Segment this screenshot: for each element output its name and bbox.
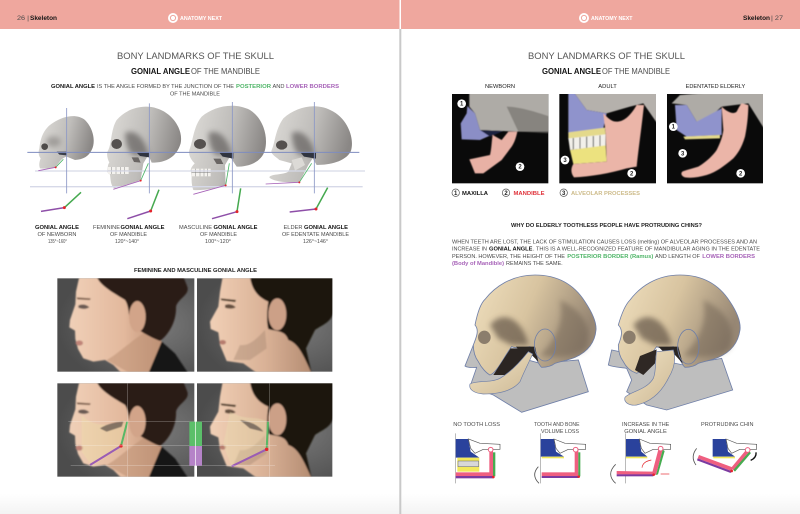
- angle lines on skulls: [38, 159, 312, 194]
- explanation paragraph: PERSON. HOWEVER, THE HEIGHT OF THE: [452, 254, 565, 260]
- caption: masculine: 100°~120°: [205, 239, 231, 245]
- caption: elderly: [282, 225, 349, 245]
- caption: no tooth loss: NO TOOTH LOSS: [453, 422, 500, 428]
- legend: mandible: [502, 189, 545, 197]
- angle diagram: feminine: [127, 190, 159, 219]
- caption: increase in the gonial angle: [622, 422, 670, 435]
- skull: feminine: [107, 107, 181, 188]
- skull: elderly edentate: [269, 106, 352, 182]
- caption: newborn: GONIAL ANGLE: [35, 225, 79, 231]
- explanation paragraph: AND LENGTH OF: [655, 254, 701, 260]
- caption: newborn: 135°~160°: [48, 239, 67, 245]
- photo: woman profile: [57, 277, 194, 373]
- explanation paragraph: [452, 240, 760, 267]
- panel: newborn jaw: 2: [518, 165, 522, 171]
- photo: man with overlay: [197, 382, 333, 478]
- caption: feminine: OF MANDIBLE: [110, 232, 147, 238]
- photo: woman with overlay: [57, 382, 194, 478]
- large skull figures: [465, 275, 740, 412]
- jaw panels: [452, 92, 765, 183]
- panel: adult jaw: 3: [563, 158, 567, 164]
- subtitle: left page: [131, 67, 260, 76]
- diagram captions: [453, 422, 754, 435]
- explanation paragraph: LOWER BORDERS: [702, 254, 755, 260]
- caption: masculine: MASCULINE: [179, 225, 212, 231]
- diagram: increase in the gonial angle: [611, 433, 671, 483]
- legend: maxilla: 1: [454, 191, 458, 197]
- folio: right: Skeleton: [743, 15, 770, 22]
- legend: maxilla: [452, 189, 489, 197]
- caption: newborn: OF NEWBORN: [38, 232, 77, 238]
- portrait photo grid: [57, 277, 333, 478]
- logo: left: ANATOMY NEXT: [180, 16, 223, 22]
- height comparison bars: [189, 422, 202, 466]
- logo: left: [168, 13, 223, 23]
- subtitle: left page: OF THE MANDIBLE: [191, 67, 260, 76]
- explanation paragraph: GONIAL ANGLE: [489, 247, 533, 253]
- explanation paragraph: WHEN TEETH ARE LOST, THE LACK OF STIMULATION CAUSES LOSS (melting) OF ALVEOLAR PROCESSES AND AN: [452, 240, 757, 246]
- legend: mandible: MANDIBLE: [514, 191, 545, 197]
- explanation paragraph: INCREASE IN: [452, 247, 487, 253]
- legend: alveolar processes: 3: [562, 191, 566, 197]
- panel: adult jaw: [559, 92, 658, 183]
- legend: mandible: 2: [504, 191, 508, 197]
- legend: alveolar processes: ALVEOLAR PROCESSES: [571, 191, 640, 197]
- caption: elderly: ELDER: [284, 225, 303, 231]
- folio: left: Skeleton: [30, 15, 57, 22]
- definition text: LOWER BORDERS: [286, 84, 339, 90]
- panel: edentated elderly jaw: [667, 92, 765, 183]
- title: right page: BONY LANDMARKS OF THE SKULL: [528, 51, 686, 62]
- logo: right: ANATOMY NEXT: [591, 16, 633, 22]
- folio: left: 26 |: [17, 15, 29, 22]
- diagram: no tooth loss: [456, 433, 500, 483]
- definition text: [51, 84, 339, 98]
- skull: masculine: [189, 106, 266, 190]
- definition text: IS THE ANGLE FORMED BY THE JUNCTION OF THE: [97, 84, 234, 90]
- panel: edentated elderly jaw: 1: [672, 125, 676, 131]
- subtitle: right page: GONIAL ANGLE: [542, 67, 601, 76]
- caption: elderly: OF EDENTATE MANDIBLE: [282, 232, 349, 238]
- caption: tooth and bone volume loss: VOLUME LOSS: [541, 429, 579, 435]
- alignment guides: [27, 102, 365, 193]
- explanation paragraph: REMAINS THE SAME.: [506, 261, 563, 267]
- panel: newborn jaw: [452, 92, 550, 183]
- definition text: OF THE MANDIBLE: [170, 92, 220, 98]
- definition text: AND: [272, 84, 285, 90]
- question heading: WHY DO ELDERLY TOOTHLESS PEOPLE HAVE PROTRUDING CHINS?: [511, 223, 703, 229]
- header band: left page: [0, 0, 400, 29]
- skull: no tooth loss profile, left: [465, 275, 596, 412]
- caption: increase in the gonial angle: GONIAL ANGLE: [624, 429, 667, 435]
- logo: right: [579, 13, 633, 23]
- legend: maxilla: MAXILLA: [462, 191, 489, 197]
- explanation paragraph: (Body of Mandible): [452, 261, 504, 267]
- photo: man profile: [197, 277, 333, 373]
- caption: increase in the gonial angle: INCREASE IN THE: [622, 422, 670, 428]
- folio: right: | 27: [771, 15, 784, 22]
- diagram: tooth and bone volume loss: [535, 433, 586, 483]
- skull comparison figure: [27, 102, 365, 219]
- bottom page shadow: [0, 494, 800, 514]
- skull: newborn: [39, 116, 94, 169]
- panel: edentated elderly jaw: 3: [681, 151, 685, 157]
- diagram: protruding chin: [693, 439, 757, 473]
- caption: masculine: [179, 225, 258, 245]
- folio: left: [17, 15, 57, 22]
- caption: elderly: 126°~146°: [303, 239, 328, 245]
- panel label: newborn: NEWBORN: [485, 84, 515, 90]
- header band: right page: [401, 0, 800, 29]
- stage diagrams: [456, 433, 757, 483]
- angle diagram: elderly: [290, 188, 328, 212]
- panel label: adult: ADULT: [598, 84, 617, 90]
- explanation paragraph: . THIS IS A WELL-RECOGNIZED FEATURE OF MANDIBULAR AGING IN THE EDENTATE: [533, 247, 760, 253]
- title: left page: BONY LANDMARKS OF THE SKULL: [117, 51, 275, 62]
- caption: tooth and bone volume loss: TOOTH AND BONE: [534, 422, 580, 428]
- angle diagram: newborn: [41, 192, 81, 211]
- definition text: POSTERIOR: [236, 84, 271, 90]
- folio: right: [743, 15, 784, 22]
- caption: masculine: GONIAL ANGLE: [214, 225, 258, 231]
- subtitle: left page: GONIAL ANGLE: [131, 67, 190, 76]
- definition text: GONIAL ANGLE: [51, 84, 95, 90]
- caption: masculine: OF MANDIBLE: [200, 232, 237, 238]
- spine gutter: [399, 29, 401, 514]
- caption: newborn: [35, 225, 79, 245]
- legend: alveolar processes: [560, 189, 640, 197]
- panel: adult jaw: 2: [630, 171, 634, 177]
- caption: feminine: 120°~140°: [115, 239, 139, 245]
- legend: [452, 189, 640, 197]
- caption: feminine: [93, 225, 165, 245]
- caption: protruding chin: PROTRUDING CHIN: [701, 422, 754, 428]
- panel label: edentated elderly: EDENTATED ELDERLY: [686, 84, 746, 90]
- caption: elderly: GONIAL ANGLE: [304, 225, 348, 231]
- caption: tooth and bone volume loss: [534, 422, 580, 435]
- heading: feminine and masculine: FEMININE AND MASCULINE GONIAL ANGLE: [134, 268, 257, 274]
- caption: feminine: FEMININE: [93, 225, 120, 231]
- skull: protruding chin profile, right: [608, 275, 740, 410]
- panel: edentated elderly jaw: 2: [739, 171, 743, 177]
- subtitle: right page: OF THE MANDIBLE: [602, 67, 670, 76]
- guide lines: [68, 383, 277, 478]
- subtitle: right page: [542, 67, 670, 76]
- panel: newborn jaw: 1: [460, 102, 464, 108]
- caption: feminine: GONIAL ANGLE: [120, 225, 165, 231]
- angle diagram: masculine: [212, 188, 241, 219]
- explanation paragraph: POSTERIOR BORDER (Ramus): [567, 254, 653, 260]
